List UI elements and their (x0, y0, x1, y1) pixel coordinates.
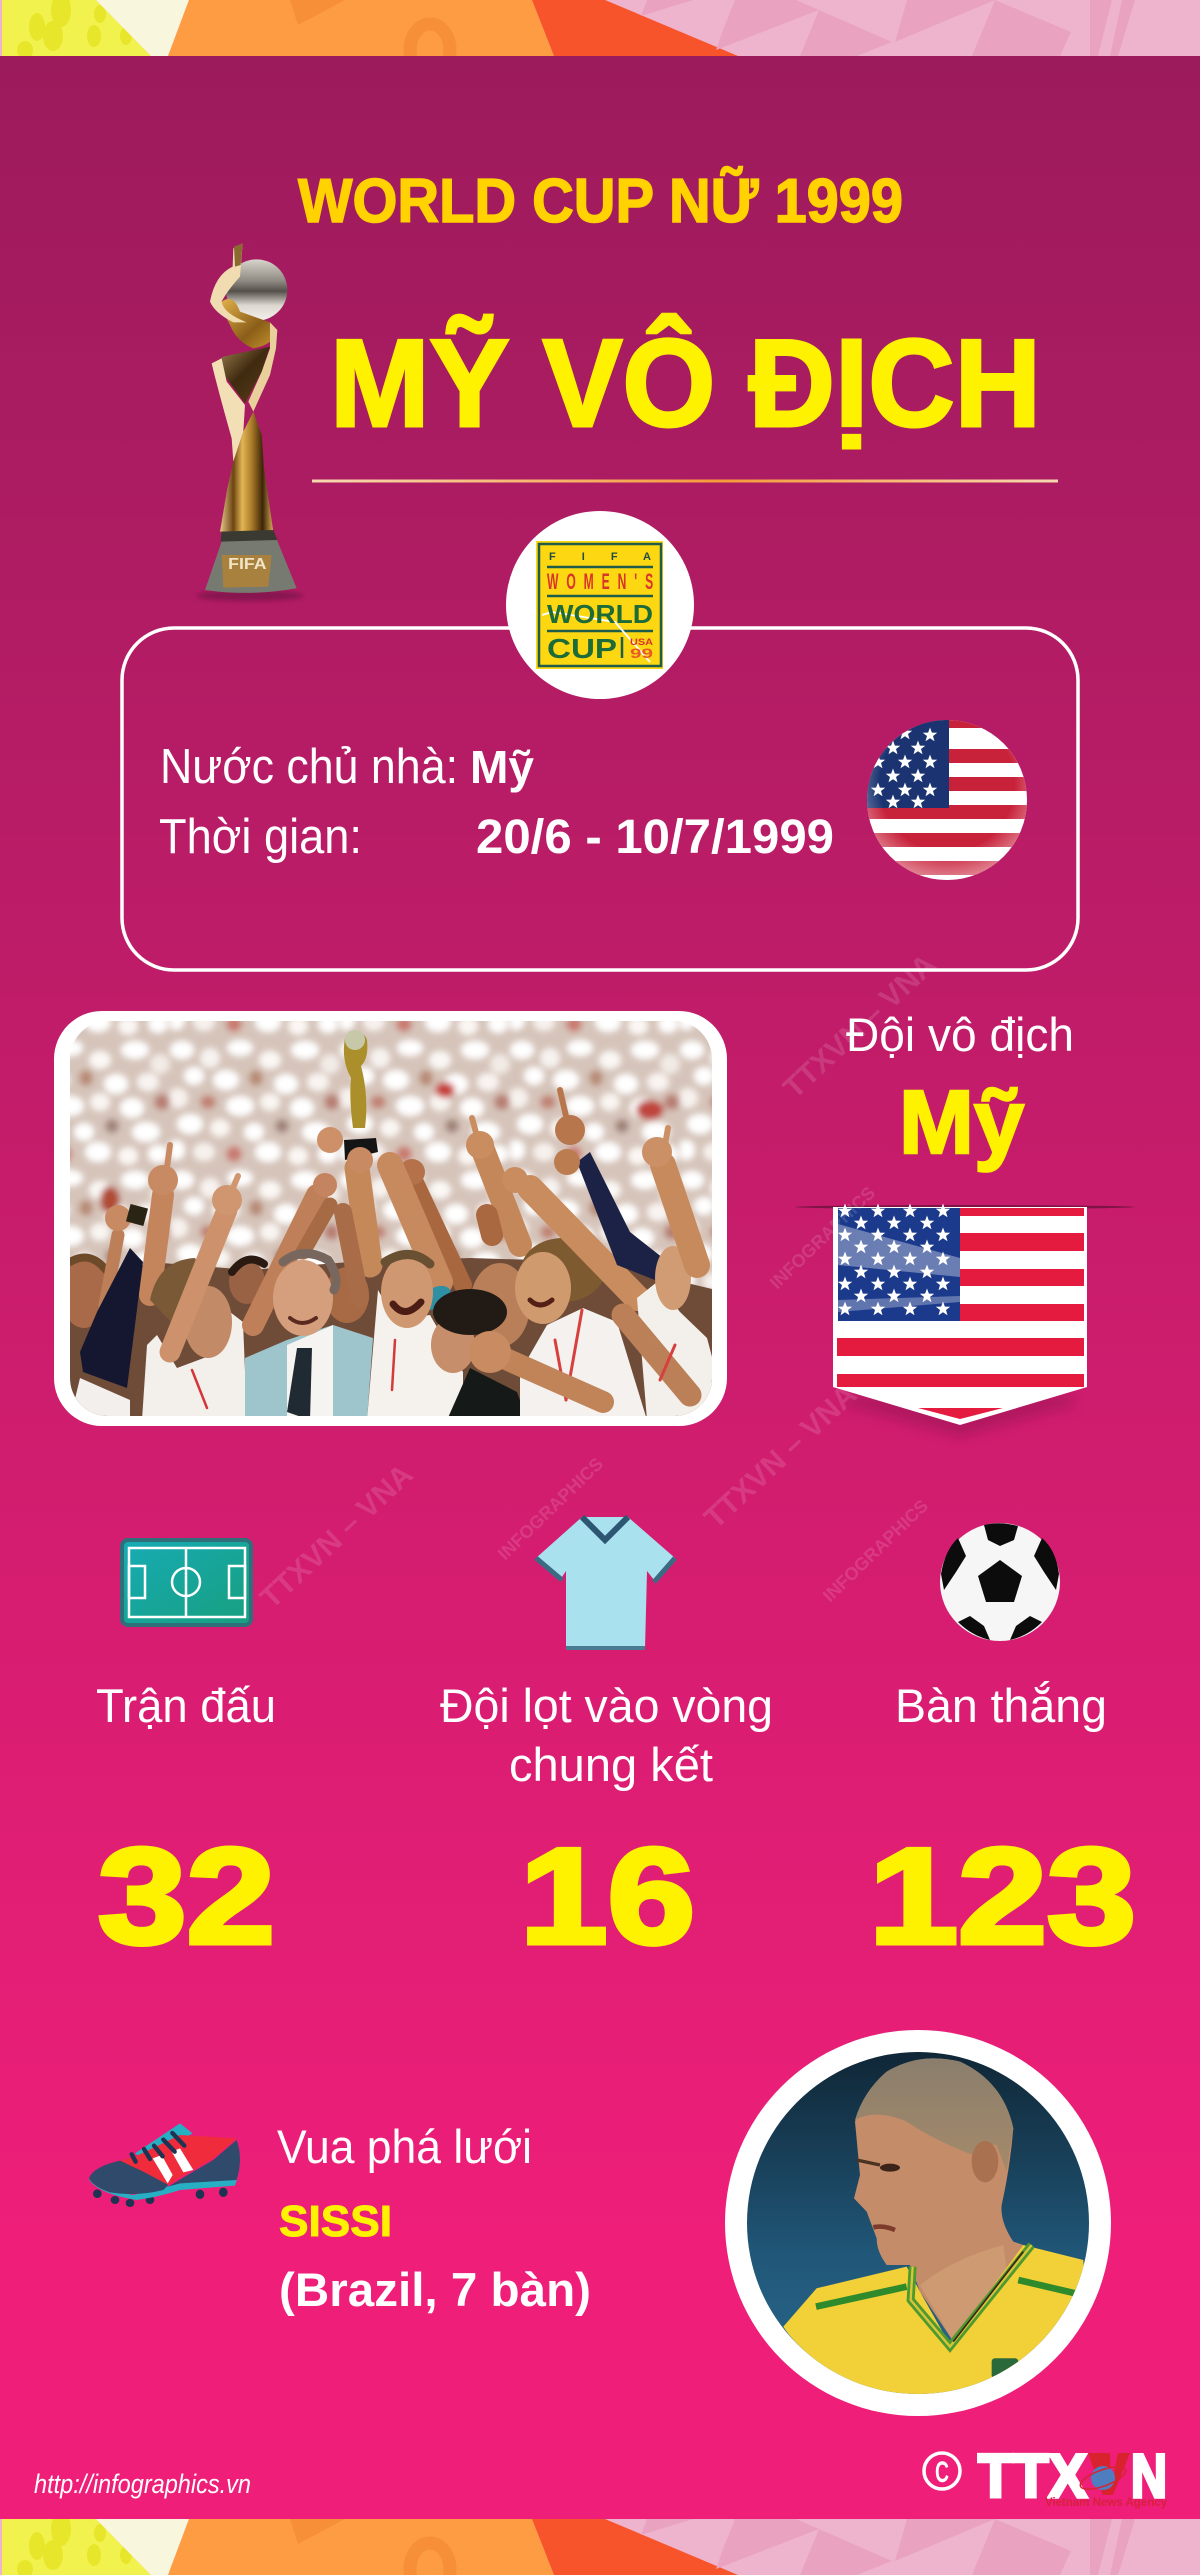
photo: Sissi portrait (725, 2030, 1111, 2416)
title divider rule (312, 480, 1058, 482)
label: matches: Trận đấu (96, 1679, 276, 1732)
right players (637, 1282, 716, 1420)
wordmark TTXVN: N (1131, 2442, 1167, 2510)
watermarks (254, 948, 942, 1615)
wordmark TTXVN (978, 2442, 1167, 2510)
navy sleeved arm (577, 1152, 663, 1282)
icon: jersey (536, 1517, 675, 1650)
label: finalist teams: Đội lọt vào vòng (440, 1679, 773, 1732)
icon: round US flag (867, 720, 1027, 880)
text: top scorer label: Vua phá lưới (277, 2120, 532, 2173)
tagline: Vietnam News Agency (1045, 2495, 1167, 2509)
logo: FIFA Women's World Cup USA 99: 99 (630, 645, 653, 661)
text: champion name: Mỹ (899, 1073, 1024, 1173)
stat: finalist teams (440, 1517, 773, 1972)
players and officials (60, 1030, 716, 1420)
number: 16 teams: 16 (520, 1820, 695, 1972)
watermarks: INFOGRAPHICS (766, 1183, 879, 1293)
copyright symbol: C (935, 2456, 949, 2489)
label: goals: Bàn thắng (895, 1679, 1107, 1732)
text: champion label: Đội vô địch (846, 1008, 1074, 1061)
logo: FIFA Women's World Cup USA 99: USA (630, 637, 654, 647)
photo: US team celebrating with the trophy (54, 1011, 727, 1426)
logo: FIFA Women's World Cup USA 99: WOMEN'S (547, 569, 653, 594)
label: finalist teams (440, 1679, 773, 1791)
watermarks: INFOGRAPHICS (819, 1496, 932, 1606)
icon: world cup trophy: FIFA (228, 556, 266, 573)
flag banner: USA (795, 1204, 1135, 1437)
title: World Cup Nữ 1999: WORLD CUP NỮ 1999 (298, 167, 903, 236)
crowd background (70, 1021, 712, 1289)
face and neck (854, 2058, 1023, 2342)
logo: FIFA Women's World Cup USA 99: WORLD (547, 599, 653, 629)
text: top scorer name: SISSI (279, 2197, 392, 2246)
watermarks: TTXVN – VNA (777, 948, 942, 1105)
dark-haired woman (470, 1263, 530, 1347)
text: tournament dates (159, 810, 834, 864)
number: 32 matches: 32 (98, 1820, 275, 1972)
player in centre right (520, 1308, 647, 1420)
top decorative band (0, 0, 1200, 76)
text: host country: Nước chủ nhà: (160, 740, 458, 794)
text: tournament dates: 20/6 - 10/7/1999 (476, 811, 834, 864)
stat: goals (869, 1523, 1136, 1972)
centre player (367, 1290, 463, 1420)
wordmark TTXVN: TTX (978, 2442, 1087, 2510)
logo: TTXVN copyright (924, 2442, 1167, 2510)
text: host country: Mỹ (470, 741, 534, 793)
number: 123 goals: 123 (869, 1820, 1136, 1972)
icon: world cup trophy (197, 243, 303, 601)
icon: soccer ball (940, 1523, 1060, 1641)
text: tournament dates: Thời gian: (159, 810, 362, 864)
logo: FIFA Women's World Cup USA 99 (506, 511, 694, 699)
text: top scorer details: (Brazil, 7 bàn) (279, 2263, 591, 2316)
watermarks: TTXVN – VNA (254, 1458, 419, 1615)
info panel: host and dates (122, 628, 1078, 970)
logo: FIFA Women's World Cup USA 99: FIFA (549, 551, 651, 563)
text: website URL: http://infographics.vn (34, 2469, 251, 2499)
icon: football boot (88, 2123, 240, 2207)
copyright symbol (924, 2453, 960, 2489)
logo: FIFA Women's World Cup USA 99: CUP (547, 633, 617, 664)
stat: matches (96, 1540, 276, 1972)
heading: Mỹ vô địch: MỸ VÔ ĐỊCH (330, 314, 1041, 453)
shadowed crowd of bodies (66, 1258, 716, 1420)
icon: football pitch (122, 1540, 251, 1625)
bottom decorative band (0, 2512, 1200, 2575)
label: finalist teams: chung kết (509, 1738, 713, 1791)
official in light suit (245, 1325, 373, 1420)
trophy held up (344, 1032, 367, 1128)
watermarks: TTXVN – VNA (698, 1378, 863, 1535)
watermarks: INFOGRAPHICS (494, 1454, 607, 1564)
